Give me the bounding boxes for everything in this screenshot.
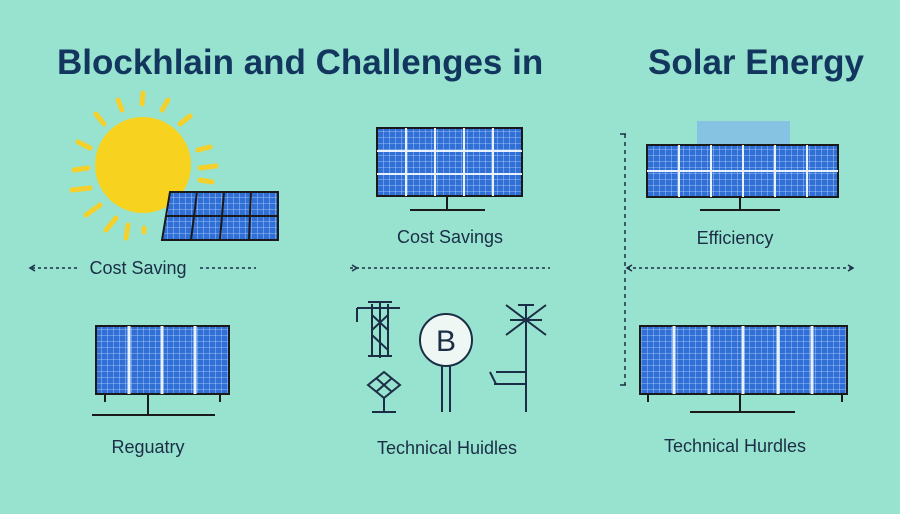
label: technical hurdles: Technical Hurdles	[664, 436, 806, 456]
label: efficiency: Efficiency	[697, 228, 773, 248]
arrow: right double	[620, 134, 853, 385]
label: technical huidles: Technical Huidles	[377, 438, 517, 458]
title	[57, 43, 864, 82]
arrow: middle	[350, 265, 550, 271]
panel: top right solar panel	[647, 121, 838, 210]
arrow: cost saving line	[30, 265, 256, 271]
panel: top middle solar panel	[377, 128, 522, 210]
label: reguatry: Reguatry	[111, 437, 185, 457]
icon: small solar panel	[162, 192, 278, 240]
icon: sun	[72, 93, 216, 238]
icons: technical hurdles	[357, 302, 546, 412]
icons: technical hurdles: B	[436, 325, 456, 358]
label: cost savings: Cost Savings	[397, 227, 503, 247]
panel: bottom right solar panels	[640, 326, 847, 412]
title: Blockhlain and Challenges in	[57, 43, 543, 82]
panel: bottom left solar panels	[92, 326, 229, 415]
label: cost saving: Cost Saving	[89, 258, 187, 278]
title: Solar Energy	[648, 43, 864, 82]
